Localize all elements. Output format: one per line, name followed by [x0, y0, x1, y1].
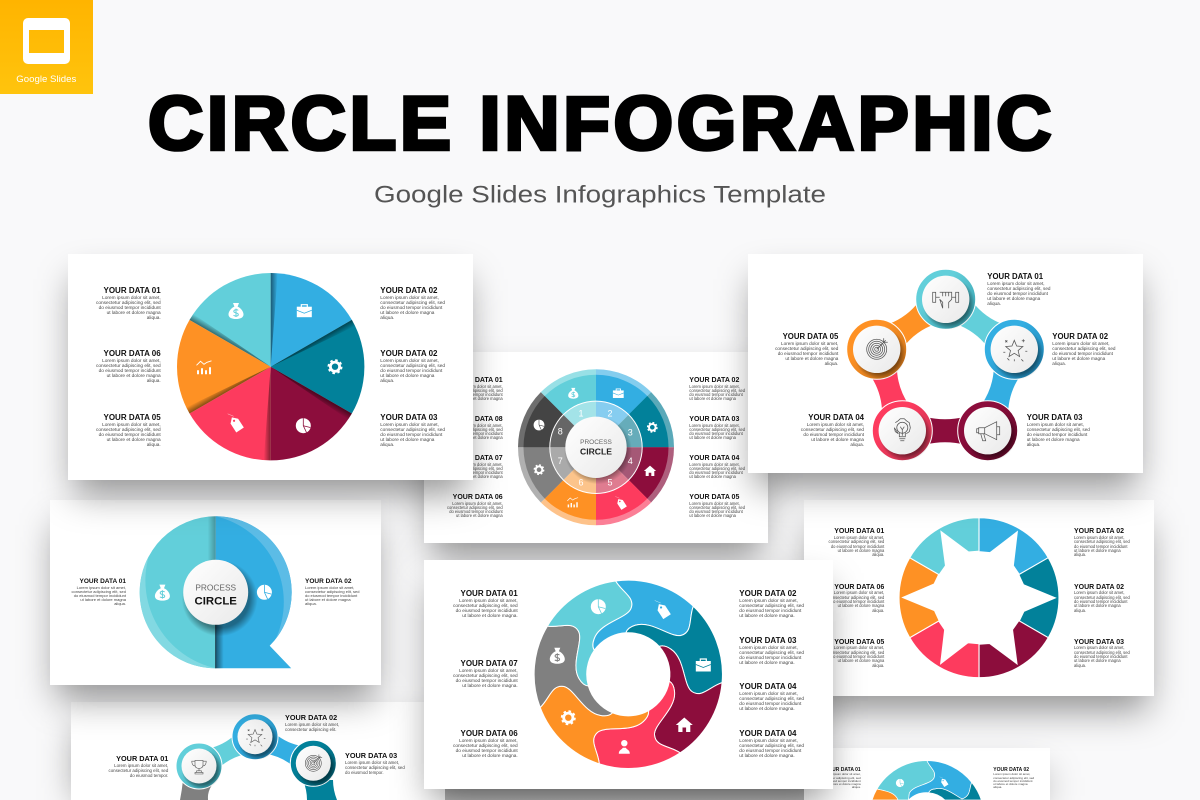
text: your data 05: aliqua. [825, 361, 838, 366]
text: your data 02 second [1074, 584, 1130, 613]
text: your data 01: consectetur adipiscing elit, sed [453, 604, 518, 609]
text: your data 01: ut labore et dolore magna [456, 396, 503, 401]
text: your data 06: do eiusmod tempor incididunt [449, 509, 503, 514]
outer ring [502, 353, 690, 541]
node: data 04 [872, 401, 932, 461]
text: your data 02 second: consectetur adipiscing elit, sed [380, 364, 445, 369]
text: your data 02 second: YOUR DATA 02 [1074, 584, 1124, 590]
text: your data 06: YOUR DATA 06 [834, 584, 884, 590]
text: your data 02: do eiusmod tempor incididunt [305, 593, 357, 598]
text: your data 02: Lorem ipsum dolor sit amet, [689, 384, 740, 389]
step numbers: 8 [558, 427, 563, 437]
text: your data 02: do eiusmod tempor incididunt [993, 779, 1032, 783]
text: your data 06: consectetur adipiscing elit, sed [829, 595, 884, 600]
text: your data 02: Lorem ipsum dolor sit amet, [305, 585, 354, 590]
text: your data 06 [829, 584, 884, 613]
text: your data 02: YOUR DATA 02 [993, 767, 1029, 773]
text: your data 05: do eiusmod tempor incididunt [99, 433, 161, 438]
text: your data 01: YOUR DATA 01 [80, 578, 126, 585]
chart: six-pointed star ring [900, 518, 1058, 678]
text: your data 03: ut labore et dolore magna [1027, 437, 1080, 442]
text: your data 02: consectetur adipiscing elit, sed [380, 301, 445, 306]
text: your data 01: do eiusmod tempor. [130, 773, 168, 778]
text: your data 01: Lorem ipsum dolor sit amet, [834, 535, 884, 540]
text: your data 01: ut labore et dolore magna. [462, 614, 518, 619]
text: your data 02 [305, 578, 360, 606]
text: your data 04 [739, 683, 804, 712]
text: your data 05: consectetur adipiscing elit, sed [689, 505, 745, 510]
text: your data 04: Lorem ipsum dolor sit amet, [689, 462, 740, 467]
text: your data 01: do eiusmod tempor incididunt [74, 593, 126, 598]
panel: six-slice pie slide [68, 254, 473, 480]
text: your data 05: do eiusmod tempor incididunt [831, 654, 884, 659]
text: your data 06: ut labore et dolore magna [838, 603, 884, 608]
node: data 03 [290, 740, 336, 786]
text: your data 03: aliqua. [1074, 663, 1086, 668]
text: your data 06: consectetur adipiscing elit, sed [96, 364, 161, 369]
text: your data 01 [987, 272, 1050, 306]
text: your data 02 second: do eiusmod tempor incididunt [380, 369, 442, 374]
node: data 01 [176, 743, 222, 789]
text: your data 04: consectetur adipiscing elit, sed [739, 697, 804, 702]
chart: linked circles [176, 714, 337, 800]
text: your data 03: aliqua. [380, 443, 394, 448]
text: your data 03: YOUR DATA 03 [689, 416, 739, 423]
text: your data 03 [1026, 413, 1090, 447]
text: your data 02: consectetur adipiscing elit. [285, 727, 336, 732]
panel: five linked circles slide [748, 254, 1143, 473]
text: your data 01: ut labore et dolore magna [826, 782, 861, 786]
text: your data 03: Lorem ipsum dolor sit amet, [1074, 645, 1125, 650]
badge: google slides [0, 0, 93, 94]
text: your data 03: consectetur adipiscing elit, sed [1027, 427, 1090, 432]
text: your data 02: Lorem ipsum dolor sit amet, [739, 599, 798, 604]
text: your data 02 [1052, 332, 1116, 366]
text: your data 06: do eiusmod tempor incididunt [99, 369, 161, 374]
text: your data 05: aliqua. [147, 443, 161, 448]
text: your data 02: Lorem ipsum dolor sit amet, [285, 722, 339, 727]
text: your data 02: do eiusmod tempor incididunt [380, 306, 442, 311]
text: your data 02 second [380, 349, 445, 384]
text: your data 01: Lorem ipsum dolor sit amet, [987, 281, 1045, 286]
panel: eight-step process circle slide [424, 352, 768, 543]
text: your data 03: Lorem ipsum dolor sit amet, [345, 760, 399, 765]
text: your data 04 second: ut labore et dolore magna. [739, 754, 795, 759]
text: your data 02: ut labore et dolore magna. [739, 614, 795, 619]
text: your data 03: do eiusmod tempor. [345, 770, 384, 775]
text: your data 02 [1074, 528, 1130, 557]
text: your data 01: YOUR DATA 01 [987, 272, 1043, 281]
text: your data 03: consectetur adipiscing elit, sed [1074, 650, 1130, 655]
chart: process circle: PROCESS [580, 439, 613, 446]
text: your data 03: consectetur adipiscing elit, sed [380, 428, 445, 433]
text: your data 03: consectetur adipiscing elit, sed [689, 427, 745, 432]
text: your data 07: consectetur adipiscing elit, sed [453, 674, 518, 679]
text: your data 04: consectetur adipiscing elit, sed [801, 427, 864, 432]
text: your data 03: consectetur adipiscing elit, sed [739, 651, 804, 656]
badge: google slides: Google Slides [16, 74, 77, 85]
text: your data 03: Lorem ipsum dolor sit amet, [1027, 422, 1084, 427]
chart: process circle: CIRCLE [580, 446, 612, 456]
text: your data 02: ut labore et dolore magna [305, 597, 351, 602]
chart: seven-part swirl donut [534, 580, 722, 768]
donut icons [550, 599, 711, 754]
text: your data 02: do eiusmod tempor incididunt [689, 392, 743, 397]
text: your data 04: ut labore et dolore magna [811, 437, 864, 442]
text: your data 02 [993, 767, 1034, 789]
text: your data 03 [345, 751, 405, 775]
text: your data 06 [447, 494, 503, 518]
text: your data 05: Lorem ipsum dolor sit amet, [781, 341, 838, 346]
text: your data 08: ut labore et dolore magna [456, 435, 503, 440]
node: data 03 [958, 401, 1018, 461]
text: your data 05: Lorem ipsum dolor sit amet, [689, 501, 740, 506]
text: your data 04 second: YOUR DATA 04 [739, 729, 796, 738]
text: your data 02: Lorem ipsum dolor sit amet, [1052, 341, 1110, 346]
text: your data 01: Lorem ipsum dolor sit amet, [824, 772, 861, 776]
text: your data 07: ut labore et dolore magna. [462, 684, 518, 689]
node: data 02 [232, 714, 278, 760]
text: your data 04: ut labore et dolore magna [689, 474, 736, 479]
text: your data 07: YOUR DATA 07 [460, 659, 518, 668]
text: your data 03: consectetur adipiscing elit, sed [345, 765, 405, 770]
text: your data 02: Lorem ipsum dolor sit amet, [1074, 535, 1125, 540]
text: your data 05: Lorem ipsum dolor sit amet, [834, 645, 884, 650]
text: your data 01 [820, 767, 861, 789]
text: your data 07: consectetur adipiscing elit, sed [447, 466, 503, 471]
text: your data 01: consectetur adipiscing elit, sed [987, 286, 1050, 291]
pie icons [196, 303, 342, 433]
text: your data 01: aliqua. [987, 301, 1001, 306]
text: your data 02 second: ut labore et dolore magna [380, 374, 434, 379]
text: your data 02: ut labore et dolore magna [1074, 548, 1121, 553]
chart: six-slice pie [177, 273, 364, 460]
panel: speech-bubble process circle slide [50, 500, 381, 685]
text: your data 01: Lorem ipsum dolor sit amet, [114, 763, 168, 768]
text: your data 05: YOUR DATA 05 [104, 413, 161, 422]
subtitle: Google Slides Infographics Template [374, 182, 826, 209]
text: your data 06: aliqua. [147, 379, 161, 384]
text: your data 01: do eiusmod tempor incididunt [456, 609, 518, 614]
text: your data 01 [828, 528, 884, 557]
text: your data 03: Lorem ipsum dolor sit amet, [689, 423, 740, 428]
text: your data 02: ut labore et dolore magna [1052, 356, 1105, 361]
text: your data 01: consectetur adipiscing elit, sed [109, 768, 168, 773]
text: your data 02: YOUR DATA 02 [1074, 528, 1124, 535]
step numbers: 7 [558, 456, 563, 466]
node: data 02 [984, 319, 1044, 379]
text: your data 06: YOUR DATA 06 [460, 729, 518, 738]
text: your data 02: YOUR DATA 02 [305, 578, 351, 585]
text: your data 02: do eiusmod tempor incididunt [1074, 544, 1127, 549]
text: your data 07: ut labore et dolore magna [456, 474, 503, 479]
text: your data 06: consectetur adipiscing elit, sed [447, 505, 503, 510]
inner segments [541, 392, 651, 502]
node: data 05 [847, 319, 907, 379]
text: your data 01: Lorem ipsum dolor sit amet, [102, 296, 161, 301]
text: your data 01 [108, 754, 168, 778]
text: your data 03: YOUR DATA 03 [380, 413, 438, 422]
text: your data 02: ut labore et dolore magna [689, 396, 736, 401]
text: your data 03: Lorem ipsum dolor sit amet, [380, 423, 439, 428]
step numbers: 1 [578, 408, 584, 418]
text: your data 01: YOUR DATA 01 [460, 589, 518, 598]
text: your data 02 second: Lorem ipsum dolor sit amet, [380, 359, 439, 364]
text: your data 04: Lorem ipsum dolor sit amet, [739, 692, 798, 697]
text: your data 03: ut labore et dolore magna [380, 438, 434, 443]
text: your data 02: YOUR DATA 02 [689, 377, 739, 384]
text: your data 02: YOUR DATA 02 [739, 589, 796, 598]
text: your data 06: aliqua. [872, 608, 884, 613]
text: your data 08: Lorem ipsum dolor sit amet, [452, 423, 503, 428]
text: your data 06: Lorem ipsum dolor sit amet, [459, 739, 518, 744]
text: your data 01: consectetur adipiscing elit, sed [72, 589, 126, 594]
text: your data 02: consectetur adipiscing elit, sed [1074, 539, 1130, 544]
text: your data 05: consectetur adipiscing elit, sed [829, 650, 884, 655]
text: your data 02 [689, 377, 745, 401]
text: your data 02 second: aliqua. [380, 379, 394, 384]
text: your data 03: aliqua. [1027, 442, 1040, 447]
text: your data 01: YOUR DATA 01 [834, 528, 884, 535]
text: your data 05: YOUR DATA 05 [834, 638, 884, 646]
text: your data 01: consectetur adipiscing elit, sed [447, 388, 503, 393]
text: your data 07: YOUR DATA 07 [453, 455, 503, 462]
text: your data 05: YOUR DATA 05 [783, 332, 838, 341]
text: your data 04: YOUR DATA 04 [808, 413, 864, 422]
step numbers: 3 [628, 428, 633, 438]
step numbers: 2 [607, 408, 613, 418]
text: your data 08: do eiusmod tempor incididunt [449, 431, 503, 436]
text: your data 06 [453, 730, 518, 759]
text: your data 03: ut labore et dolore magna [1074, 658, 1121, 663]
text: your data 05: do eiusmod tempor incididunt [689, 509, 743, 514]
text: your data 03: do eiusmod tempor incididunt [1027, 432, 1087, 437]
text: your data 04: consectetur adipiscing elit, sed [689, 466, 745, 471]
text: your data 07: do eiusmod tempor incididunt [456, 679, 518, 684]
text: your data 04 [800, 413, 864, 447]
text: your data 03: Lorem ipsum dolor sit amet, [739, 646, 798, 651]
text: your data 02 [285, 713, 339, 732]
text: your data 01: do eiusmod tempor incididunt [99, 306, 161, 311]
text: your data 05: ut labore et dolore magna [785, 356, 838, 361]
text: your data 04 second: do eiusmod tempor incididunt [739, 749, 801, 754]
text: your data 07 [453, 660, 518, 689]
text: your data 01: consectetur adipiscing elit, sed [820, 776, 861, 780]
text: your data 02 second: YOUR DATA 02 [380, 349, 438, 358]
chart: swirl circle partial [872, 760, 981, 800]
text: your data 03: do eiusmod tempor incididunt [380, 433, 442, 438]
main segments [508, 360, 684, 535]
text: your data 01: do eiusmod tempor incididunt [449, 392, 503, 397]
text: your data 05: ut labore et dolore magna [107, 438, 161, 443]
text: your data 01: ut labore et dolore magna [80, 597, 126, 602]
text: your data 02: aliqua. [993, 785, 1002, 789]
text: your data 01: ut labore et dolore magna [838, 548, 884, 553]
icon: slides logo [23, 18, 70, 64]
text: your data 05: consectetur adipiscing elit, sed [775, 346, 838, 351]
text: your data 02: ut labore et dolore magna [380, 311, 434, 316]
text: your data 08: consectetur adipiscing elit, sed [447, 427, 503, 432]
text: your data 05: Lorem ipsum dolor sit amet, [102, 423, 161, 428]
text: your data 02: YOUR DATA 02 [380, 286, 438, 295]
text: your data 01: Lorem ipsum dolor sit amet, [77, 585, 126, 590]
text: your data 07: do eiusmod tempor incididunt [449, 470, 503, 475]
text: your data 02: do eiusmod tempor incididunt [739, 609, 801, 614]
panel: bottom-right partial swirl slide [803, 748, 1050, 800]
text: your data 02: do eiusmod tempor incididunt [1052, 351, 1113, 356]
text: your data 06: ut labore et dolore magna [107, 374, 161, 379]
panel: bottom-left linked circles slide [71, 702, 445, 800]
text: your data 02: consectetur adipiscing elit, sed [739, 604, 804, 609]
text: your data 02 second: do eiusmod tempor incididunt [1074, 599, 1127, 604]
text: your data 02: aliqua. [1052, 361, 1066, 366]
chart: five linked circles [847, 270, 1044, 460]
panel: star circle slide [804, 500, 1154, 696]
text: your data 06: YOUR DATA 06 [453, 494, 503, 501]
text: your data 02 [380, 286, 445, 321]
text: your data 01: Lorem ipsum dolor sit amet, [452, 384, 503, 389]
text: your data 04: aliqua. [850, 442, 864, 447]
text: your data 02: consectetur adipiscing elit, sed [1052, 346, 1116, 351]
text: your data 05 [775, 332, 838, 366]
text: your data 05: consectetur adipiscing elit, sed [96, 428, 161, 433]
text: your data 02: Lorem ipsum dolor sit amet, [380, 296, 439, 301]
text: your data 01: do eiusmod tempor incididunt [831, 544, 884, 549]
text: your data 04 [689, 455, 745, 479]
text: your data 01: ut labore et dolore magna [107, 311, 161, 316]
text: your data 04: do eiusmod tempor incididunt [803, 432, 864, 437]
text: your data 01: YOUR DATA 01 [825, 767, 861, 773]
chart: process circle [518, 369, 674, 526]
text: your data 01: do eiusmod tempor incididunt [987, 291, 1048, 296]
text: your data 01: YOUR DATA 01 [116, 754, 168, 763]
text: your data 08: YOUR DATA 08 [453, 416, 503, 423]
text: your data 07: Lorem ipsum dolor sit amet, [459, 669, 518, 674]
text: your data 06: Lorem ipsum dolor sit amet, [102, 359, 161, 364]
text: your data 02: YOUR DATA 02 [1052, 332, 1108, 341]
text: your data 03 [1074, 638, 1130, 668]
text: your data 08 [447, 416, 503, 440]
text: your data 02: ut labore et dolore magna [993, 782, 1028, 786]
text: your data 06: YOUR DATA 06 [104, 349, 161, 358]
text: your data 01: YOUR DATA 01 [104, 286, 161, 295]
text: your data 06: do eiusmod tempor incididunt [831, 599, 884, 604]
text: your data 03 [739, 637, 804, 666]
node: data 01 [916, 269, 976, 329]
text: your data 02 second: ut labore et dolore magna [1074, 603, 1121, 608]
text: your data 01: do eiusmod tempor incididunt [822, 779, 861, 783]
text: your data 03: do eiusmod tempor incididunt [1074, 654, 1127, 659]
text: your data 04 second: consectetur adipiscing elit, sed [739, 744, 804, 749]
text: your data 01: Lorem ipsum dolor sit amet, [459, 599, 518, 604]
text: your data 02: aliqua. [305, 601, 317, 606]
text: your data 03: ut labore et dolore magna. [739, 661, 795, 666]
text: your data 03: YOUR DATA 03 [345, 751, 397, 760]
text: your data 05: ut labore et dolore magna [689, 513, 736, 518]
text: your data 03: do eiusmod tempor incididunt [689, 431, 743, 436]
text: your data 02 second: consectetur adipiscing elit, sed [1074, 595, 1130, 600]
text: your data 03 [380, 413, 445, 448]
text: your data 04: do eiusmod tempor incididunt [689, 470, 743, 475]
text: your data 02: Lorem ipsum dolor sit amet, [993, 772, 1030, 776]
text: your data 05: YOUR DATA 05 [689, 494, 739, 501]
text: your data 05: do eiusmod tempor incididunt [778, 351, 838, 356]
text: your data 04: ut labore et dolore magna. [739, 707, 795, 712]
text: your data 02: consectetur adipiscing elit, sed [689, 388, 745, 393]
step numbers: 4 [628, 456, 633, 466]
text: your data 01: ut labore et dolore magna [987, 296, 1040, 301]
text: your data 07: Lorem ipsum dolor sit amet, [452, 462, 503, 467]
text: your data 01 [453, 590, 518, 619]
text: your data 06: ut labore et dolore magna [456, 513, 503, 518]
text: your data 01: consectetur adipiscing elit, sed [829, 539, 884, 544]
text: your data 02: consectetur adipiscing elit, sed [993, 776, 1034, 780]
text: your data 03: YOUR DATA 03 [1074, 638, 1124, 646]
text: your data 06 [96, 349, 161, 384]
text: your data 05 [829, 638, 884, 668]
text: your data 07 [447, 455, 503, 479]
text: your data 02 second: aliqua. [1074, 608, 1086, 613]
text: your data 03: ut labore et dolore magna [689, 435, 736, 440]
text: your data 04: YOUR DATA 04 [739, 682, 796, 691]
text: your data 05: ut labore et dolore magna [838, 658, 884, 663]
text: your data 06: do eiusmod tempor incididunt [456, 749, 518, 754]
text: your data 02 [739, 590, 804, 619]
text: your data 04 second: Lorem ipsum dolor sit amet, [739, 739, 798, 744]
text: your data 04: Lorem ipsum dolor sit amet, [807, 422, 864, 427]
chart: speech bubble circle: PROCESS [195, 582, 237, 592]
text: your data 04 second [739, 730, 804, 759]
text: your data 05 [689, 494, 745, 518]
text: your data 04: do eiusmod tempor incididunt [739, 702, 801, 707]
text: your data 01 [447, 377, 503, 401]
text: your data 02: YOUR DATA 02 [285, 713, 337, 722]
text: your data 01: consectetur adipiscing elit, sed [96, 301, 161, 306]
panel: swirl donut slide [424, 560, 833, 789]
text: your data 01: aliqua. [872, 552, 884, 557]
text: your data 03: YOUR DATA 03 [739, 636, 796, 645]
text: your data 01: YOUR DATA 01 [453, 377, 503, 384]
text: your data 05 [96, 413, 161, 448]
text: your data 01: aliqua. [852, 785, 861, 789]
step numbers [558, 408, 633, 487]
text: your data 03: do eiusmod tempor incididunt [739, 656, 801, 661]
text: your data 03 [689, 416, 745, 440]
text: your data 06: ut labore et dolore magna. [462, 754, 518, 759]
text: your data 01: aliqua. [114, 601, 126, 606]
text: your data 05: aliqua. [872, 663, 884, 668]
text: your data 06: consectetur adipiscing elit, sed [453, 744, 518, 749]
chart: speech bubble circle: CIRCLE [195, 596, 237, 608]
step numbers: 5 [607, 477, 613, 487]
text: your data 03: YOUR DATA 03 [1027, 413, 1082, 422]
step numbers: 6 [578, 477, 584, 487]
text: your data 04: YOUR DATA 04 [689, 455, 739, 462]
text: your data 02: aliqua. [1074, 552, 1086, 557]
text: your data 01 [72, 578, 126, 606]
text: your data 02: consectetur adipiscing elit, sed [305, 589, 359, 594]
text: your data 06: Lorem ipsum dolor sit amet, [834, 590, 884, 595]
text: your data 06: Lorem ipsum dolor sit amet, [452, 501, 503, 506]
text: your data 01: aliqua. [147, 316, 161, 321]
text: your data 01 [96, 286, 161, 321]
chart: speech bubble circle [140, 516, 292, 668]
segment icons [534, 388, 657, 510]
text: your data 02 second: Lorem ipsum dolor sit amet, [1074, 590, 1125, 595]
text: your data 02: aliqua. [380, 316, 394, 321]
